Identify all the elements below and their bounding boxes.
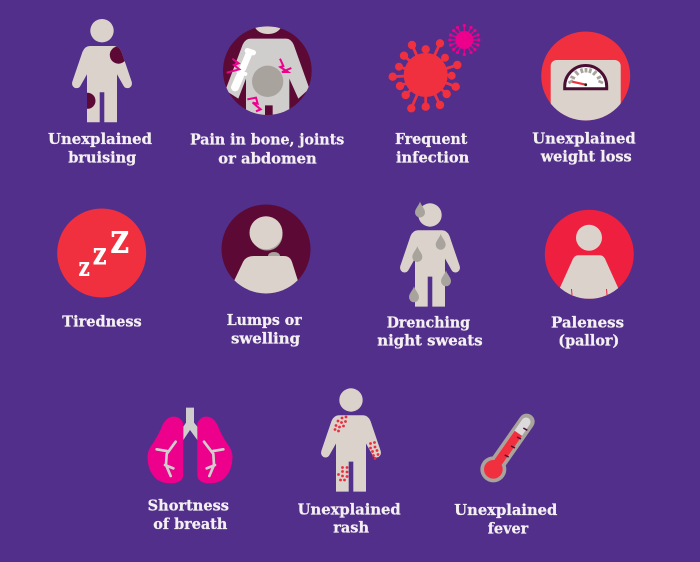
icon: lungs bbox=[147, 408, 233, 483]
icon: thermometer bbox=[480, 422, 527, 482]
icon: person with sweat drops bbox=[400, 202, 460, 307]
label: Paleness (pallor): Paleness bbox=[551, 314, 624, 331]
label: Pain in bone, joints or abdomen bbox=[190, 132, 344, 167]
label: Unexplained bruising: bruising bbox=[68, 149, 136, 166]
label: Drenching night sweats bbox=[377, 314, 483, 350]
label: Unexplained weight loss bbox=[532, 130, 636, 166]
label: Pain in bone, joints or abdomen: Pain in bone, joints bbox=[190, 132, 344, 149]
label: Paleness (pallor) bbox=[551, 314, 624, 350]
label: Shortness of breath bbox=[148, 498, 229, 533]
label: Unexplained bruising: Unexplained bbox=[48, 131, 152, 148]
label: Unexplained bruising bbox=[48, 131, 152, 166]
icon: red virus bbox=[388, 39, 461, 113]
icon: pink virus bbox=[448, 24, 480, 56]
label: Lumps or swelling: Lumps or bbox=[227, 312, 302, 329]
label: Shortness of breath: of breath bbox=[153, 516, 228, 533]
label: Unexplained rash: rash bbox=[333, 520, 369, 537]
label: Drenching night sweats: Drenching bbox=[387, 314, 470, 331]
icon: person with rash bbox=[321, 388, 381, 492]
label: Unexplained rash bbox=[298, 501, 401, 537]
label: Unexplained fever: fever bbox=[488, 520, 529, 537]
icon: person with bruises bbox=[72, 19, 132, 122]
label: Pain in bone, joints or abdomen: or abdomen bbox=[218, 150, 317, 167]
label: Paleness (pallor): (pallor) bbox=[558, 333, 619, 350]
icon: lumps or swelling bbox=[222, 204, 310, 300]
label: Unexplained fever: Unexplained bbox=[454, 502, 557, 519]
label: Tiredness: Tiredness bbox=[62, 314, 142, 331]
label: Unexplained weight loss: Unexplained bbox=[532, 130, 636, 147]
icon: paleness bbox=[545, 210, 634, 305]
label: Shortness of breath: Shortness bbox=[148, 498, 229, 515]
label: Unexplained rash: Unexplained bbox=[298, 501, 401, 518]
icon: tiredness ZZZ: Z bbox=[79, 260, 90, 280]
icon: tiredness ZZZ: Z bbox=[111, 226, 129, 260]
icon: pain in bone, joints or abdomen bbox=[223, 25, 312, 119]
label: Frequent infection: infection bbox=[396, 150, 470, 167]
label: Frequent infection: Frequent bbox=[395, 131, 468, 148]
label: Unexplained weight loss: weight loss bbox=[540, 149, 632, 166]
label: Drenching night sweats: night sweats bbox=[377, 333, 483, 350]
label: Lumps or swelling bbox=[227, 312, 302, 347]
label: Frequent infection bbox=[395, 131, 470, 167]
label: Unexplained fever bbox=[454, 502, 557, 537]
label: Lumps or swelling: swelling bbox=[231, 330, 300, 347]
icon: tiredness ZZZ: Z bbox=[93, 244, 106, 269]
icon: tiredness ZZZ bbox=[57, 208, 146, 298]
icon: weighing scale bbox=[541, 32, 630, 120]
